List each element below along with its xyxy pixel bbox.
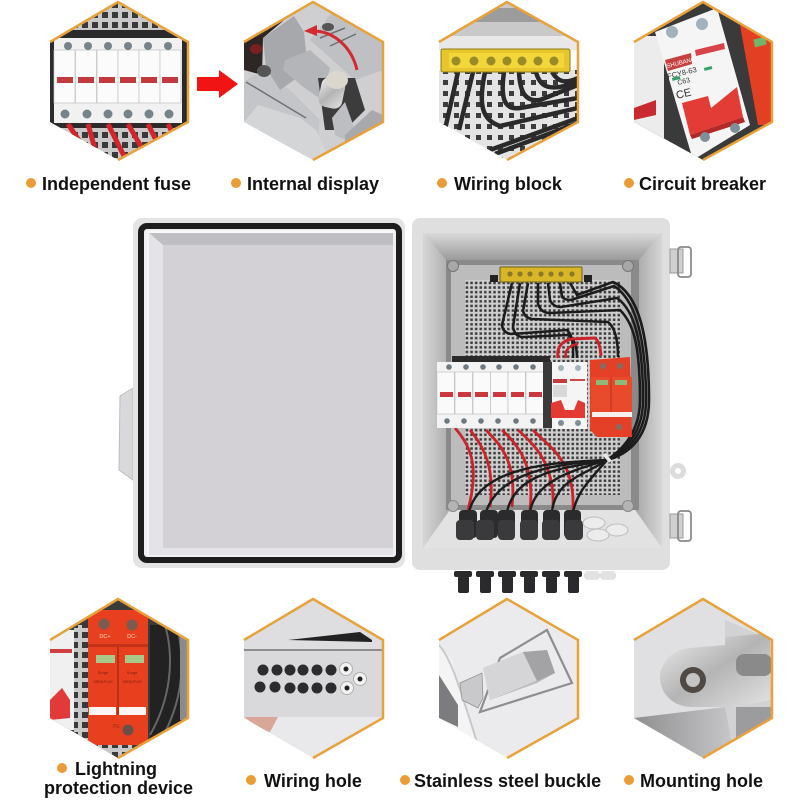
panel: internal display: [244, 2, 383, 160]
label: wiring block: Wiring block: [454, 174, 563, 194]
photo: red two-pole breaker: FCY8-63: [666, 65, 698, 81]
photo: red two-pole breaker: [634, 2, 772, 160]
mounting ear: [670, 463, 686, 479]
label: lightning protection device: protection device: [44, 778, 193, 798]
panel: wiring block: [439, 2, 578, 160]
hexagon frame: [244, 2, 383, 160]
white knockout rings: [583, 517, 628, 541]
cable tie: [603, 453, 612, 463]
photo: screw and metal ear: [634, 599, 772, 759]
lid mounting tab: [119, 388, 133, 480]
panel: lightning protection device: [50, 599, 188, 760]
photo: open fuse holder: [244, 2, 383, 160]
lid outer shell: [133, 218, 405, 568]
photo: buckle: [439, 599, 578, 759]
label: lightning protection device: Lightning: [75, 759, 157, 779]
photo: yellow busbar and wires: [439, 2, 578, 160]
hexagon frame: [50, 2, 188, 160]
hexagon frame: [439, 599, 578, 758]
photo: red two-pole breaker: SHUBANG: [666, 57, 697, 70]
enclosure base: [412, 218, 691, 593]
base outer shell: [412, 218, 670, 570]
panel: independent fuse: [50, 2, 188, 160]
label: wiring hole: Wiring hole: [264, 771, 362, 791]
lid inner tray: [147, 231, 393, 555]
din rail backing: [452, 356, 550, 363]
panel: stainless steel buckle: [439, 599, 578, 759]
photo: surge protector: SRD6-PV40: [93, 680, 113, 684]
red wires from fuses: [455, 338, 601, 510]
panel: circuit breaker: [634, 2, 772, 160]
cable glands inside: [456, 510, 583, 540]
bottom hasp: [670, 511, 691, 541]
hexagon frame: [634, 2, 772, 160]
circuit breaker: [551, 362, 587, 429]
photo: surge protector: PE: [113, 724, 120, 730]
base cavity walls: [423, 233, 662, 548]
label: internal display: Internal display: [247, 174, 379, 194]
photo: surge protector: DC-: [127, 634, 137, 640]
label: independent fuse: Independent fuse: [42, 174, 191, 194]
red curved arrow: [304, 25, 357, 70]
photo: surge protector: DC+: [99, 634, 111, 640]
panel: mounting hole: [634, 599, 772, 759]
yellow wiring block: [490, 267, 592, 282]
label: circuit breaker: Circuit breaker: [639, 174, 766, 194]
perforated area: [465, 280, 620, 495]
photo: surge protector: Surge: [98, 670, 109, 675]
photo: surge protector: Surge: [127, 670, 138, 675]
lightning protection device: [590, 357, 632, 437]
black wires from block: [502, 282, 649, 460]
arrow: red right: [197, 70, 238, 98]
photo: surge protector: SRD6-PV40: [122, 680, 142, 684]
hexagon frame: [634, 599, 772, 758]
label: lightning protection device: [44, 759, 193, 798]
photo: underside of box with glands: [244, 599, 383, 759]
panel: wiring hole: [244, 599, 383, 759]
photo: fuse holders: [50, 2, 188, 160]
black gasket: [141, 226, 399, 560]
enclosure lid: [119, 218, 405, 568]
fuse holders: [437, 362, 544, 428]
photo: surge protector: [50, 599, 188, 760]
hexagon frame: [244, 599, 383, 758]
hexagon frame: [50, 599, 188, 758]
photo: red two-pole breaker: CE: [675, 87, 693, 102]
label: stainless steel buckle: Stainless steel buckle: [414, 771, 601, 791]
cable glands under box: [454, 571, 582, 593]
din rail strip: [543, 362, 552, 428]
back plate: [446, 260, 639, 512]
hexagon frame: [439, 2, 578, 160]
black wires to glands: [469, 460, 607, 512]
top hasp: [670, 247, 691, 277]
label: mounting hole: Mounting hole: [640, 771, 763, 791]
photo: red two-pole breaker: C63: [677, 77, 691, 87]
white glands under box: [584, 571, 616, 580]
